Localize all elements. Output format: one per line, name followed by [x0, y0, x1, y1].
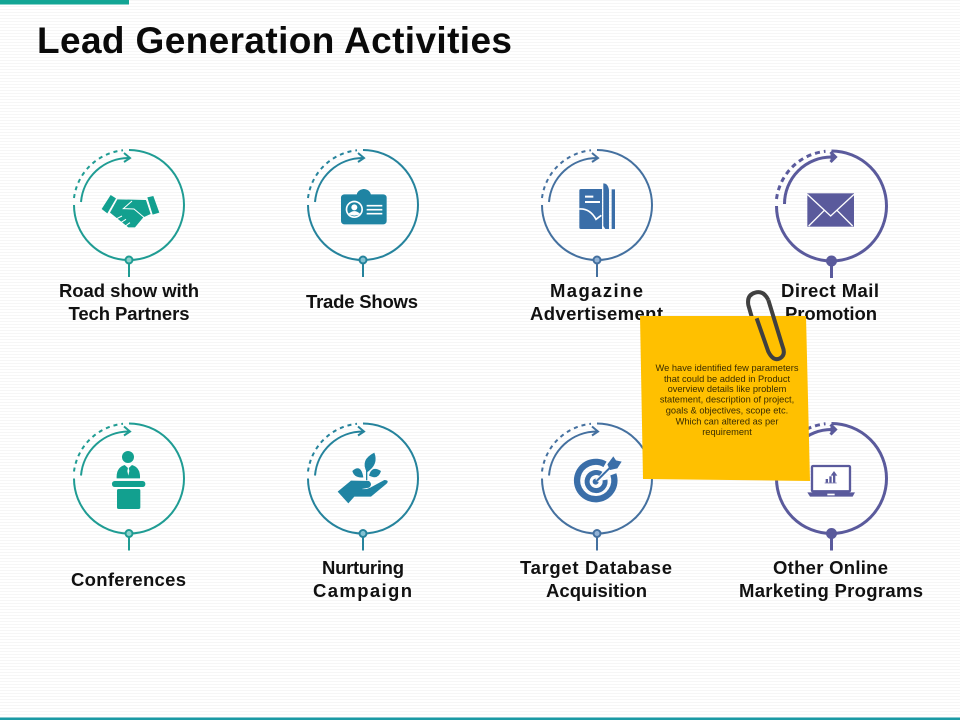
ring: online marketing — [776, 424, 886, 550]
ring: conferences — [74, 424, 184, 550]
label: direct mail: Direct Mail — [781, 280, 879, 301]
label: magazine: Magazine — [550, 280, 643, 301]
label: online marketing — [739, 557, 923, 601]
label: road show: Tech Partners — [68, 303, 190, 324]
label: road show — [59, 280, 199, 324]
callout: sticky note with paperclip: statement, description of project, — [660, 394, 794, 404]
icon: plant in hand — [338, 453, 388, 503]
label: nurturing: Nurturing — [322, 557, 404, 578]
label: magazine: Advertisement — [530, 303, 663, 324]
top accent bar — [0, 0, 129, 4]
callout: sticky note with paperclip: goals & objectives, scope etc. — [666, 406, 788, 416]
ring: magazine — [542, 150, 652, 277]
ring: nurturing — [308, 424, 418, 550]
icon: envelope — [807, 193, 854, 227]
bottom accent line — [0, 718, 960, 720]
icon: magazine — [579, 183, 615, 229]
ring: direct mail — [776, 151, 886, 278]
label: direct mail: Promotion — [785, 303, 877, 324]
label: nurturing — [313, 557, 412, 601]
label: target database — [520, 557, 672, 601]
icon: id badge — [341, 189, 387, 224]
icon: speaker at podium — [112, 451, 145, 509]
callout: sticky note with paperclip — [640, 292, 810, 481]
ring: road show — [74, 150, 184, 277]
label: magazine — [530, 280, 663, 324]
label: online marketing: Other Online — [773, 557, 888, 578]
label: road show: Road show with — [59, 280, 199, 301]
label: trade shows: Trade Shows — [306, 291, 418, 312]
icon: target with arrow — [577, 456, 622, 499]
callout: sticky note with paperclip: that could be added in Product — [664, 374, 790, 384]
label: target database: Acquisition — [546, 580, 647, 601]
label: direct mail — [781, 280, 879, 324]
ring: trade shows — [308, 150, 418, 277]
callout: sticky note with paperclip: requirement — [702, 427, 752, 437]
callout: sticky note with paperclip: Which can altered as per — [676, 416, 778, 426]
label: conferences: Conferences — [71, 569, 186, 590]
icon: laptop with chart — [807, 466, 855, 497]
ring: target database — [542, 424, 652, 550]
callout: sticky note with paperclip: We have identified few parameters — [656, 363, 799, 373]
label: online marketing: Marketing Programs — [739, 580, 923, 601]
icon: handshake — [102, 195, 159, 227]
title: Lead Generation Activities — [37, 20, 512, 61]
label: target database: Target Database — [520, 557, 672, 578]
label: nurturing: Campaign — [313, 580, 412, 601]
callout: sticky note with paperclip: overview details like problem — [668, 384, 787, 394]
